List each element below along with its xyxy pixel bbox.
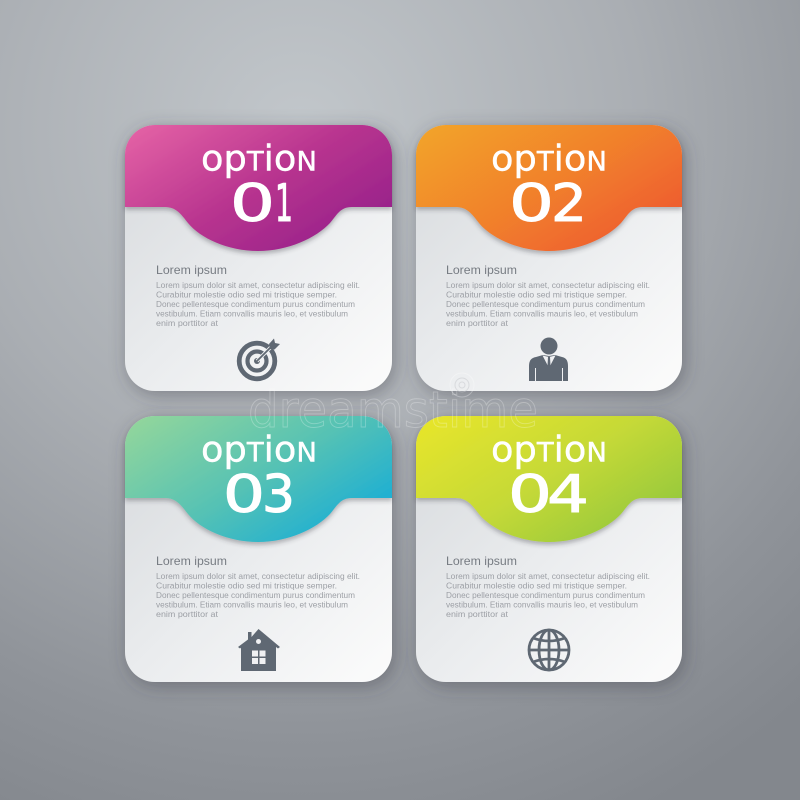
number: 0 (223, 465, 265, 525)
number: 0 (508, 465, 552, 525)
text block: Donec pellentesque condimentum purus condimentum (156, 590, 355, 600)
text block: Lorem ipsum dolor sit amet, consectetur adipiscing elit. (446, 571, 650, 581)
text block: Lorem ipsum (446, 554, 517, 568)
panel: option 01 (125, 125, 392, 391)
text block: vestibulum. Etiam convallis mauris leo, et vestibulum (446, 308, 638, 318)
heading: opTioN (491, 138, 607, 180)
number (223, 465, 295, 525)
number (230, 174, 293, 234)
text block: Lorem ipsum dolor sit amet, consectetur adipiscing elit. (156, 280, 360, 290)
panel: option 04 (416, 416, 682, 682)
text block: Curabitur molestie odio sed mi tristique semper. (156, 580, 337, 590)
header band (125, 416, 392, 542)
text block: vestibulum. Etiam convallis mauris leo, et vestibulum (156, 308, 348, 318)
text block: vestibulum. Etiam convallis mauris leo, et vestibulum (446, 600, 638, 610)
text block: Lorem ipsum (156, 263, 227, 277)
text block (446, 263, 650, 328)
number: 2 (551, 174, 587, 234)
text block: Donec pellentesque condimentum purus condimentum (446, 299, 645, 309)
icon: target (239, 338, 280, 379)
text block (446, 554, 650, 619)
card body (416, 416, 682, 682)
text block: enim porttitor at (446, 318, 509, 328)
text block: vestibulum. Etiam convallis mauris leo, et vestibulum (156, 600, 348, 610)
text block: enim porttitor at (446, 609, 509, 619)
header band (125, 125, 392, 251)
card body (125, 125, 392, 391)
text block: enim porttitor at (156, 609, 219, 619)
icon: businessman (529, 338, 568, 381)
text block: Curabitur molestie odio sed mi tristique semper. (446, 290, 627, 300)
text block: Curabitur molestie odio sed mi tristique semper. (446, 580, 627, 590)
number: 4 (547, 465, 589, 525)
text block (156, 263, 360, 328)
heading: opTioN (201, 430, 317, 470)
panel: option 02 (416, 125, 682, 391)
text block: Donec pellentesque condimentum purus condimentum (446, 590, 645, 600)
icon: house (238, 629, 280, 671)
text block: Lorem ipsum (446, 263, 517, 277)
heading: opTioN (491, 430, 607, 470)
number (508, 465, 589, 525)
header band (416, 125, 682, 251)
watermark: dreamstime (248, 381, 538, 439)
panel: option 03 (125, 416, 392, 682)
heading: opTioN (201, 138, 317, 180)
text block: Curabitur molestie odio sed mi tristique semper. (156, 290, 337, 300)
text block: Lorem ipsum dolor sit amet, consectetur adipiscing elit. (446, 280, 650, 290)
number: 3 (262, 465, 295, 525)
icon: globe (529, 630, 569, 670)
text block (156, 554, 360, 619)
header band (416, 416, 682, 542)
number: 0 (509, 174, 554, 234)
text block: Donec pellentesque condimentum purus condimentum (156, 299, 355, 309)
text block: Lorem ipsum (156, 554, 227, 568)
card body (416, 125, 682, 391)
card body (125, 416, 392, 682)
number: 1 (275, 174, 293, 234)
number (509, 174, 587, 234)
text block: Lorem ipsum dolor sit amet, consectetur adipiscing elit. (156, 571, 360, 581)
text block: enim porttitor at (156, 318, 219, 328)
number: 0 (230, 174, 275, 234)
